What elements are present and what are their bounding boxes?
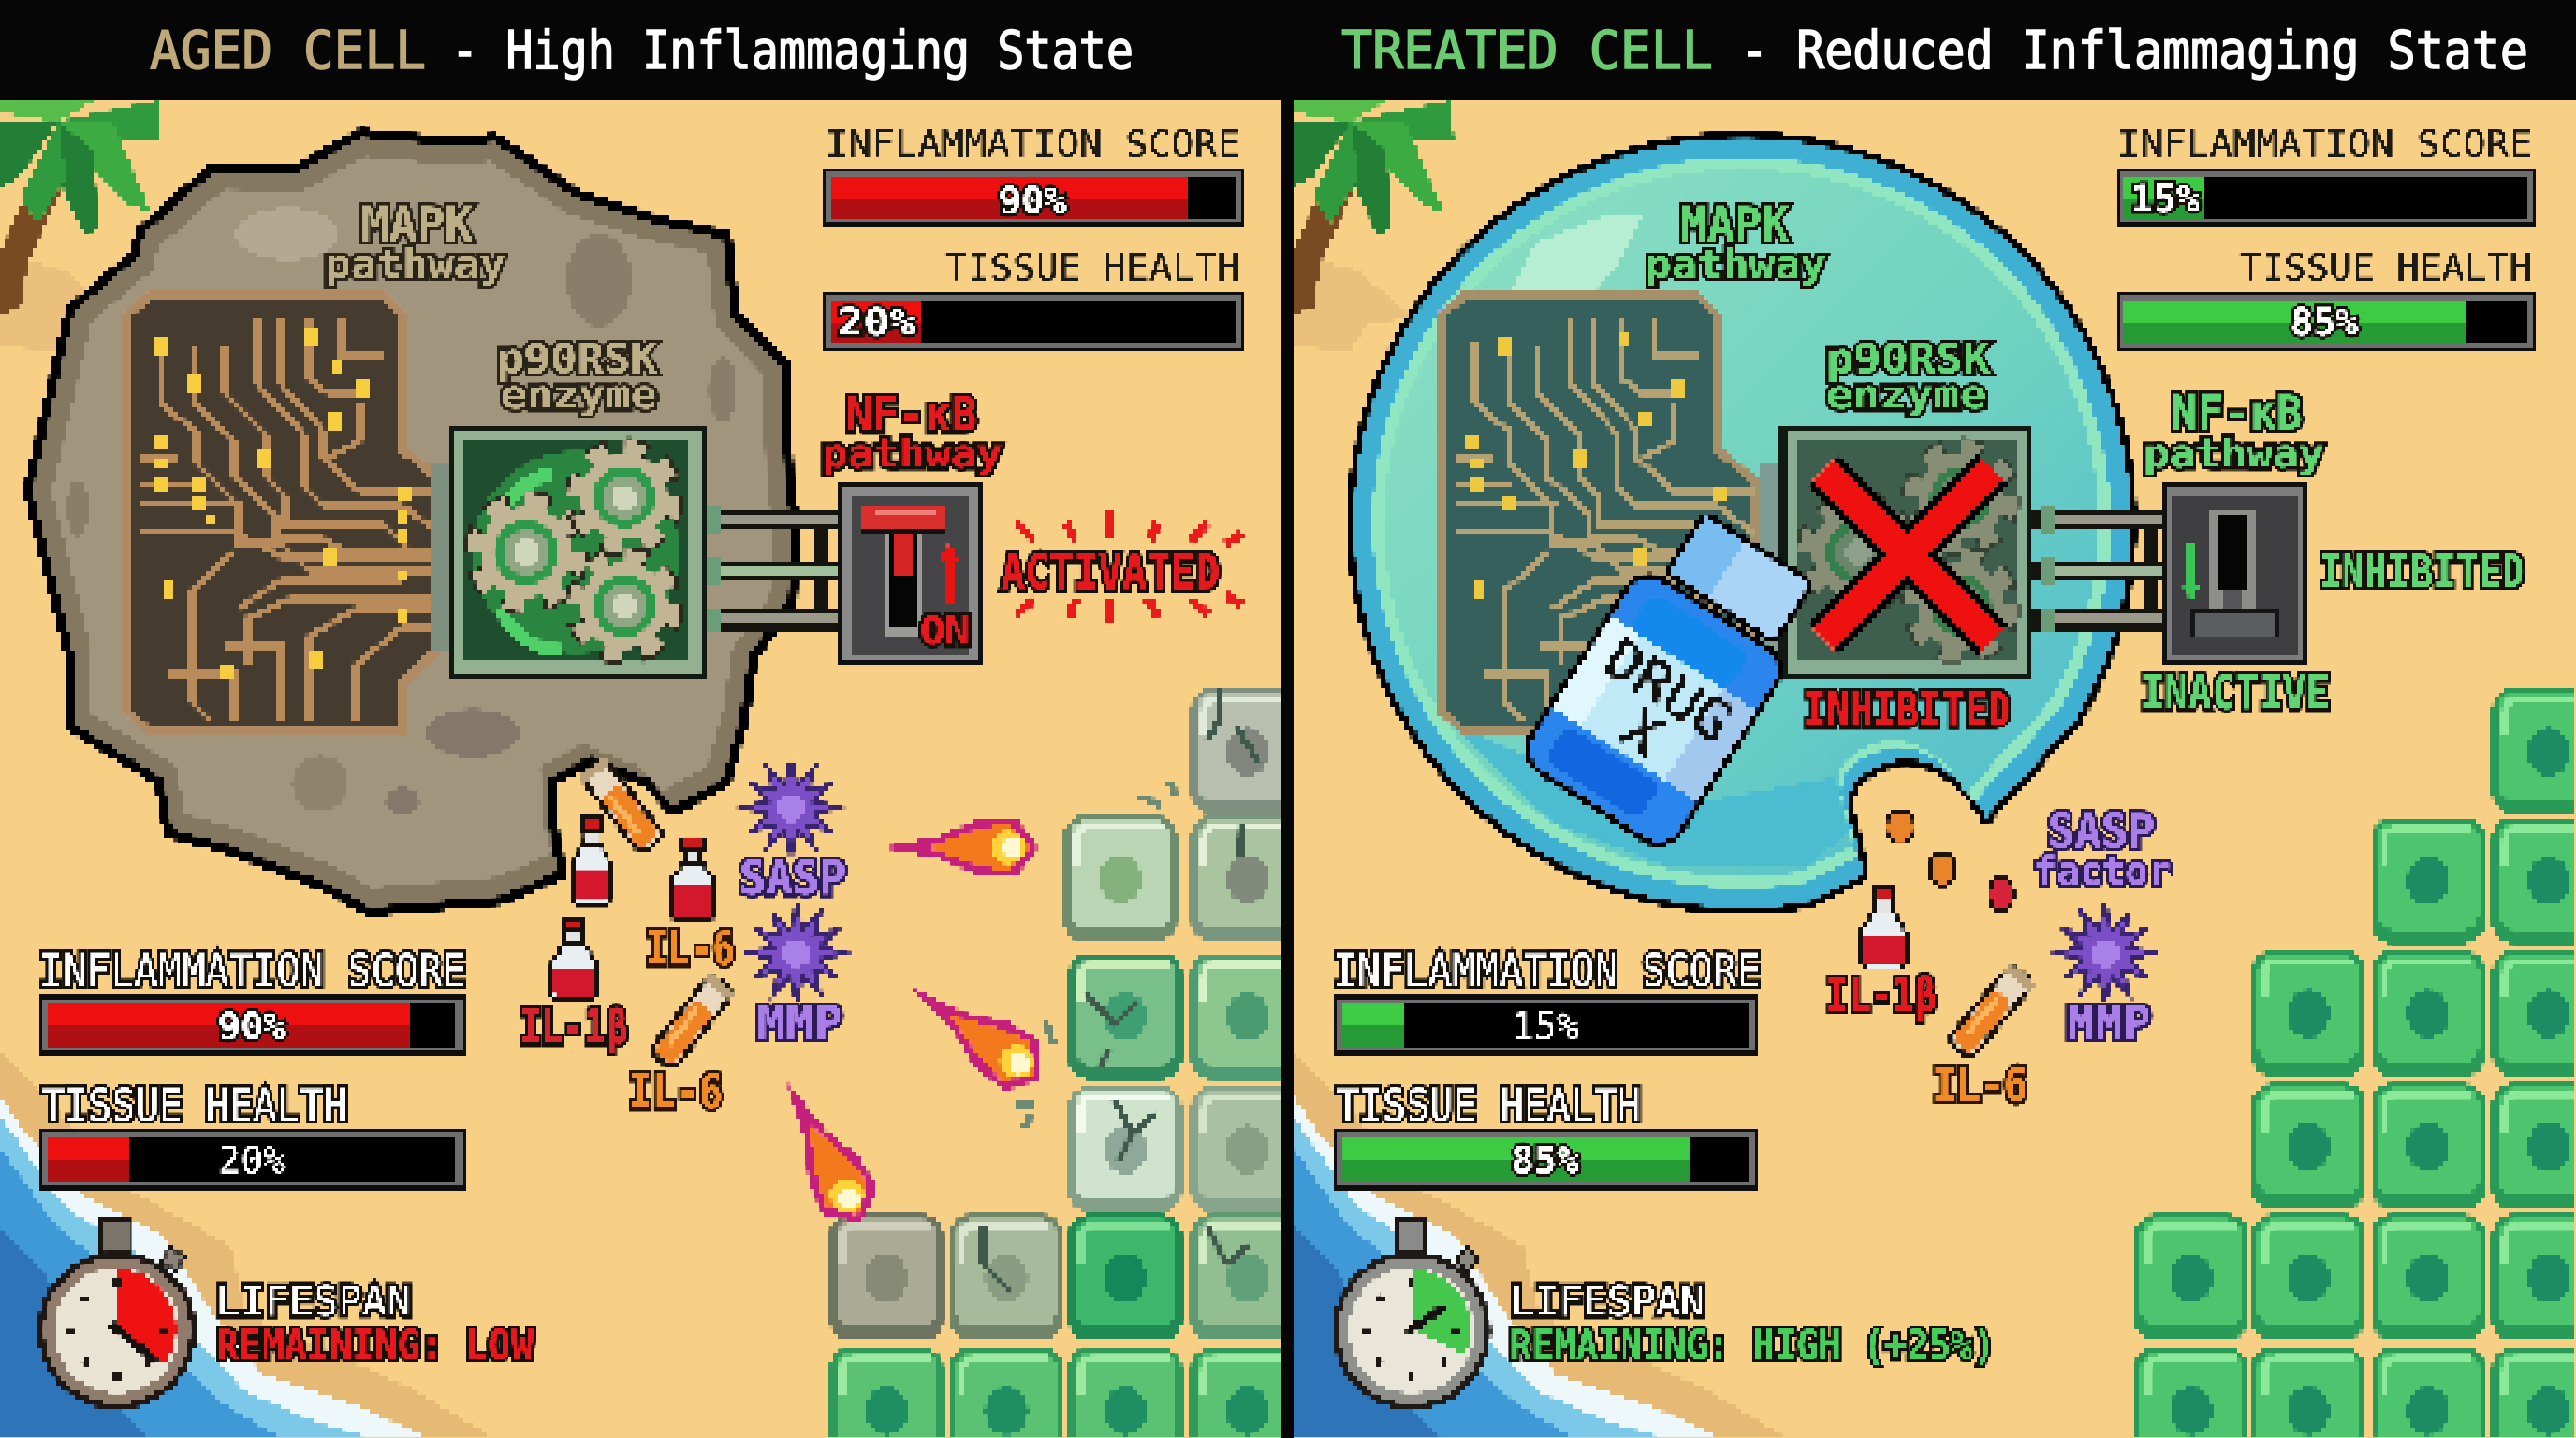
shoreline water: [1293, 1053, 1786, 1438]
rocky aged cell body: [33, 138, 791, 907]
label: NF-kB pathway: NF-κB: [846, 388, 977, 442]
damaged tissue cells: [829, 688, 1305, 1438]
gauge: tissue health top: TISSUE HEALTH: [944, 247, 1240, 288]
label: NF-kB pathway: pathway: [2144, 431, 2324, 477]
heading: aged cell: AGED CELL: [150, 21, 426, 81]
bottle label: DRUG X: DRUG: [1593, 626, 1743, 755]
bottle label: DRUG X: [1566, 626, 1743, 797]
gauge: inflammation score bottom: INFLAMMATION SCORE: [1333, 946, 1761, 997]
orange tube: [1947, 963, 2035, 1060]
red vial 3: [551, 918, 596, 1001]
connector rods to switch: [2031, 506, 2167, 633]
label: ACTIVATED: ACTIVATED: [1001, 545, 1220, 601]
gauge: inflammation score top: [2116, 124, 2537, 227]
label: SASP factor: [2034, 804, 2171, 894]
NF-kB toggle switch off: [2163, 483, 2309, 667]
label: lifespan low: [216, 1278, 534, 1370]
panel: aged cell: [0, 100, 1305, 1438]
p90RSK enzyme box with blocked gears: [1760, 424, 2031, 679]
label: IL-6 upper: IL-6: [645, 921, 735, 976]
label: NF-kB pathway: [822, 388, 1003, 477]
label: INHIBITED switch: INHIBITED: [2319, 546, 2525, 598]
aged labels and gauges layer: [39, 124, 1245, 1370]
activated burst ticks: [1017, 510, 1242, 624]
label: p90RSK enzyme: enzyme: [501, 372, 657, 418]
gauge: tissue health bottom: TISSUE HEALTH: [41, 1080, 347, 1132]
label: SASP: SASP: [739, 851, 846, 905]
drug X bottle: [1521, 504, 1830, 850]
dissipating droplets: [1886, 811, 2013, 911]
treated illustration layer: [1293, 100, 2576, 1438]
gauge: tissue health top: [2116, 247, 2537, 352]
label: MAPK pathway: MAPK: [361, 198, 473, 252]
MAPK circuit board dimmed: [1442, 296, 1754, 731]
purple MMP splat: [750, 906, 843, 1000]
label: lifespan low: LIFESPAN: [216, 1278, 411, 1326]
label: NF-kB pathway: pathway: [822, 431, 1003, 477]
label: INHIBITED enzyme: INHIBITED: [1804, 682, 2011, 737]
label: lifespan high: LIFESPAN: [1510, 1278, 1705, 1326]
gauge: tissue health top: [822, 247, 1245, 352]
label: MMP: MMP: [2067, 996, 2151, 1050]
orange tube IL-6 upper: [579, 757, 666, 855]
MAPK circuit board: [127, 296, 440, 731]
gauge: inflammation score top: 90%: [999, 180, 1066, 223]
gauge: tissue health bottom: 20%: [218, 1139, 285, 1182]
label: IL-1 beta: IL-1β: [1826, 968, 1937, 1022]
gauge: inflammation score bottom: INFLAMMATION SCORE: [39, 946, 466, 997]
label: IL-6 lower: IL-6: [628, 1064, 723, 1119]
red X over enzyme: [1823, 470, 1993, 639]
label: NF-kB pathway: [2144, 386, 2324, 477]
connector rods to NF-kB switch: [707, 506, 842, 633]
label: p90RSK enzyme: [497, 335, 658, 418]
gauge: tissue health top: 20%: [838, 301, 915, 345]
purple MMP splat: [2058, 906, 2152, 1000]
impact debris: [1016, 782, 1178, 1128]
header bar: [0, 0, 2576, 100]
label: MMP: MMP: [757, 996, 842, 1050]
bottle label: DRUG X: X: [1610, 696, 1674, 769]
label: MAPK pathway: MAPK: [1680, 198, 1789, 252]
palm tree: [0, 100, 161, 351]
fireball 1: [889, 819, 1039, 875]
gauge: inflammation score bottom: [1333, 946, 1761, 1056]
healthy cell membrane bubble: [1354, 139, 2130, 908]
gauge: inflammation score top: INFLAMMATION SCORE: [826, 124, 1240, 165]
label: p90RSK enzyme: p90RSK: [1826, 335, 1991, 383]
stopwatch high lifespan: [1332, 1221, 1491, 1410]
heading: treated cell: [1341, 21, 2528, 81]
purple SASP splat: [744, 761, 838, 855]
palm tree: [1293, 100, 1454, 351]
fireball 2: [913, 988, 1039, 1091]
label: SASP factor: factor: [2034, 848, 2171, 894]
heading: aged cell: - High Inflammaging State: [451, 21, 1134, 81]
orange tube IL-6 lower: [649, 973, 735, 1071]
aged illustration layer: [0, 100, 1305, 1438]
label: lifespan high: [1510, 1278, 1995, 1370]
red vial 1: [573, 817, 610, 903]
treated labels and gauges layer: [1333, 124, 2537, 1370]
center divider: [1281, 0, 1294, 1438]
gauge: tissue health top: 85%: [2291, 301, 2358, 345]
gauge: inflammation score bottom: 15%: [1512, 1005, 1579, 1049]
label: p90RSK enzyme: p90RSK: [497, 335, 658, 383]
stopwatch low lifespan: [37, 1221, 197, 1410]
label: ON: ON: [920, 608, 970, 653]
p90RSK enzyme box with spinning gears: [431, 424, 707, 679]
label: IL-6: IL-6: [1933, 1058, 2027, 1112]
gauge: tissue health top: TISSUE HEALTH: [2239, 247, 2532, 288]
label: MAPK pathway: pathway: [325, 242, 505, 287]
healthy tissue cells: [2134, 688, 2576, 1438]
panel: treated cell: [1293, 100, 2576, 1438]
gauge: inflammation score bottom: [39, 946, 466, 1056]
label: IL-1 beta: IL-1β: [520, 1000, 628, 1054]
gauge: tissue health bottom: 85%: [1512, 1139, 1579, 1182]
label: p90RSK enzyme: [1826, 335, 1991, 418]
red vial 2: [670, 838, 715, 920]
fireball 3: [760, 1068, 887, 1236]
NF-kB toggle switch on: [839, 483, 981, 667]
red vial: [1861, 887, 1906, 969]
gauge: inflammation score top: INFLAMMATION SCORE: [2117, 124, 2532, 165]
label: INACTIVE: INACTIVE: [2141, 666, 2330, 720]
heading: aged cell: [150, 21, 1134, 81]
label: MAPK pathway: [325, 198, 505, 287]
label: MAPK pathway: pathway: [1646, 242, 1826, 287]
shoreline water: [0, 1053, 493, 1438]
heading: treated cell: TREATED CELL: [1341, 21, 1713, 81]
label: lifespan high: REMAINING: HIGH (+25%): [1510, 1322, 1995, 1370]
label: MAPK pathway: [1646, 198, 1826, 287]
label: lifespan low: REMAINING: LOW: [216, 1322, 534, 1370]
label: SASP factor: SASP: [2048, 804, 2155, 858]
gauge: inflammation score top: 15%: [2130, 178, 2200, 221]
gauge: inflammation score top: [822, 124, 1245, 227]
label: p90RSK enzyme: enzyme: [1826, 372, 1986, 418]
gauge: inflammation score bottom: 90%: [218, 1005, 285, 1049]
gauge: tissue health bottom: [39, 1080, 466, 1190]
label: NF-kB pathway: NF-κB: [2171, 386, 2303, 440]
gauge: tissue health bottom: TISSUE HEALTH: [1336, 1080, 1641, 1132]
gauge: tissue health bottom: [1333, 1080, 1759, 1190]
